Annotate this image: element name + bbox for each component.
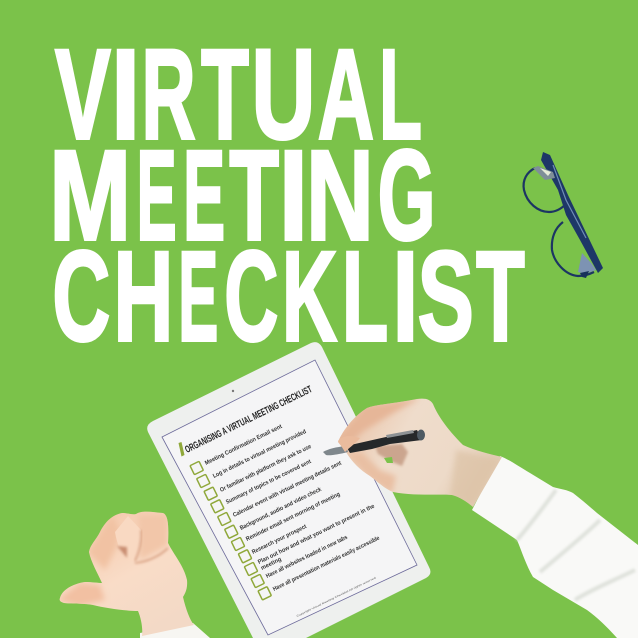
tablet body — [147, 342, 430, 638]
checklist items: Log in details to virtual meeting provided — [212, 429, 308, 480]
hand — [338, 399, 502, 507]
right arm with shirt sleeve — [323, 398, 638, 638]
title: E — [178, 226, 218, 368]
title — [49, 24, 525, 368]
checklist items — [204, 424, 381, 593]
checklist items: Research your prospect — [251, 524, 308, 556]
checklist page — [162, 360, 417, 635]
checklist heading: ORGANISING A VIRTUAL MEETING CHECKLIST — [183, 384, 314, 456]
reflection on frame — [553, 165, 586, 238]
title: C — [52, 226, 110, 368]
title: T — [476, 226, 525, 368]
title: E — [137, 124, 177, 268]
title: S — [418, 226, 474, 368]
title: E — [183, 124, 225, 268]
title: C — [224, 226, 278, 368]
page footer note: Copyright Virtual Meeting Checklist All rights reserved — [296, 576, 377, 618]
title: I — [392, 226, 418, 368]
title: H — [114, 226, 173, 368]
hinge — [580, 271, 589, 278]
title: N — [306, 124, 374, 268]
hand shading — [335, 398, 500, 506]
title: R — [142, 24, 196, 166]
title: M — [49, 124, 131, 268]
checklist items: Meeting Confirmation Email sent — [204, 424, 283, 467]
checklist items: meeting — [260, 557, 283, 572]
checklist items: Have all websites loaded in new tabs — [265, 535, 349, 580]
hand — [60, 512, 194, 636]
left hand thumb gesture — [58, 512, 210, 638]
temple arm and frame front — [541, 152, 603, 273]
checklist items: Background, audio and video check — [239, 487, 323, 532]
title: L — [342, 226, 388, 368]
title: K — [282, 226, 337, 368]
title: T — [229, 124, 279, 268]
title: G — [378, 124, 435, 268]
lens frames — [524, 168, 566, 212]
tablet — [147, 342, 430, 638]
title: U — [252, 24, 315, 166]
checklist items: Summary of topics to be covered sent — [225, 459, 312, 506]
checklist items: Have all presentation materials easily accessible — [272, 535, 381, 593]
heading accent bar — [178, 442, 184, 456]
title: T — [201, 24, 249, 166]
checklist items: Plan out how and what you want to present in the — [257, 503, 376, 566]
shirt cuff — [140, 623, 210, 638]
temple tip seen through lens — [533, 166, 555, 180]
checklist items: Reminder email sent morning of meeting — [245, 492, 342, 543]
title: V — [55, 24, 111, 166]
title: I — [279, 124, 308, 268]
tablet camera — [232, 390, 234, 392]
title: A — [318, 24, 374, 166]
sleeve folds — [517, 490, 635, 600]
checkboxes — [190, 461, 271, 600]
hand shading and finger creases — [58, 514, 168, 606]
checklist items: Calendar event with virtual meeting details sent — [232, 461, 343, 519]
checklist items: Or familiar with platform they ask to use — [219, 444, 313, 494]
icon: glasses — [524, 152, 603, 278]
title: I — [111, 24, 140, 166]
pen — [323, 430, 425, 455]
gap between fingers — [384, 457, 393, 463]
shirt sleeve — [472, 456, 638, 638]
fingers over pen — [338, 436, 360, 452]
title: L — [379, 24, 422, 166]
